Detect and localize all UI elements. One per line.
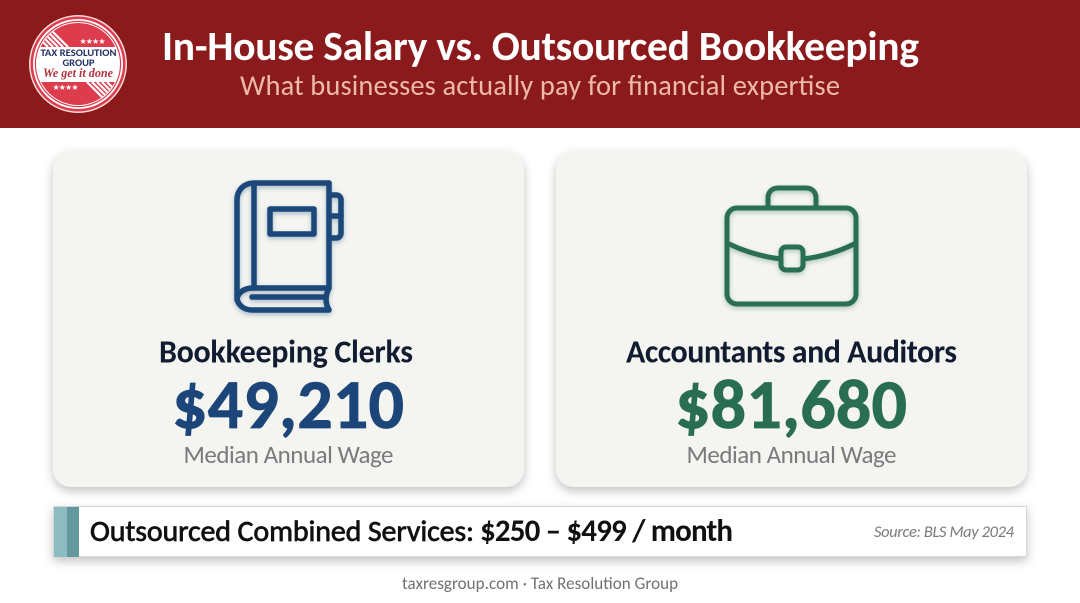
header banner xyxy=(0,0,1080,128)
subtitle: What businesses actually pay for financial expertise xyxy=(240,68,840,103)
panel: bookkeeping clerks xyxy=(53,151,524,487)
footer: taxresgroup.com · Tax Resolution Group xyxy=(402,573,678,594)
icon: briefcase xyxy=(727,188,856,304)
logo name line one: TAX RESOLUTION xyxy=(40,46,117,59)
logo stars bottom: ★★★★ xyxy=(52,83,78,93)
source note: Source: BLS May 2024 xyxy=(874,522,1015,542)
panel: accountants and auditors xyxy=(556,151,1027,487)
logo stars top: ★★★★ xyxy=(80,37,106,47)
logo top band xyxy=(40,23,116,105)
callout label: Outsourced Combined Services: xyxy=(90,513,474,550)
caption: median annual wage: Median Annual Wage xyxy=(184,439,394,470)
value: $49,210: $49,210 xyxy=(172,361,404,447)
label: accountants and auditors: Accountants and Auditors xyxy=(626,332,957,372)
caption: median annual wage: Median Annual Wage xyxy=(686,439,896,470)
logo bottom stripes xyxy=(86,82,112,98)
logo tagline: We get it done xyxy=(43,65,113,80)
callout: outsourced combined services xyxy=(54,506,1026,557)
title: In-House Salary vs. Outsourced Bookkeeping xyxy=(162,21,919,72)
value: $81,680: $81,680 xyxy=(675,361,907,447)
icon: book xyxy=(237,183,341,310)
accent bar xyxy=(54,507,79,557)
callout price range: $250 – $499 / month xyxy=(480,512,733,550)
label: bookkeeping clerks: Bookkeeping Clerks xyxy=(159,332,413,372)
logo name line two: GROUP xyxy=(62,56,95,69)
logo: Tax Resolution Group xyxy=(29,15,127,113)
